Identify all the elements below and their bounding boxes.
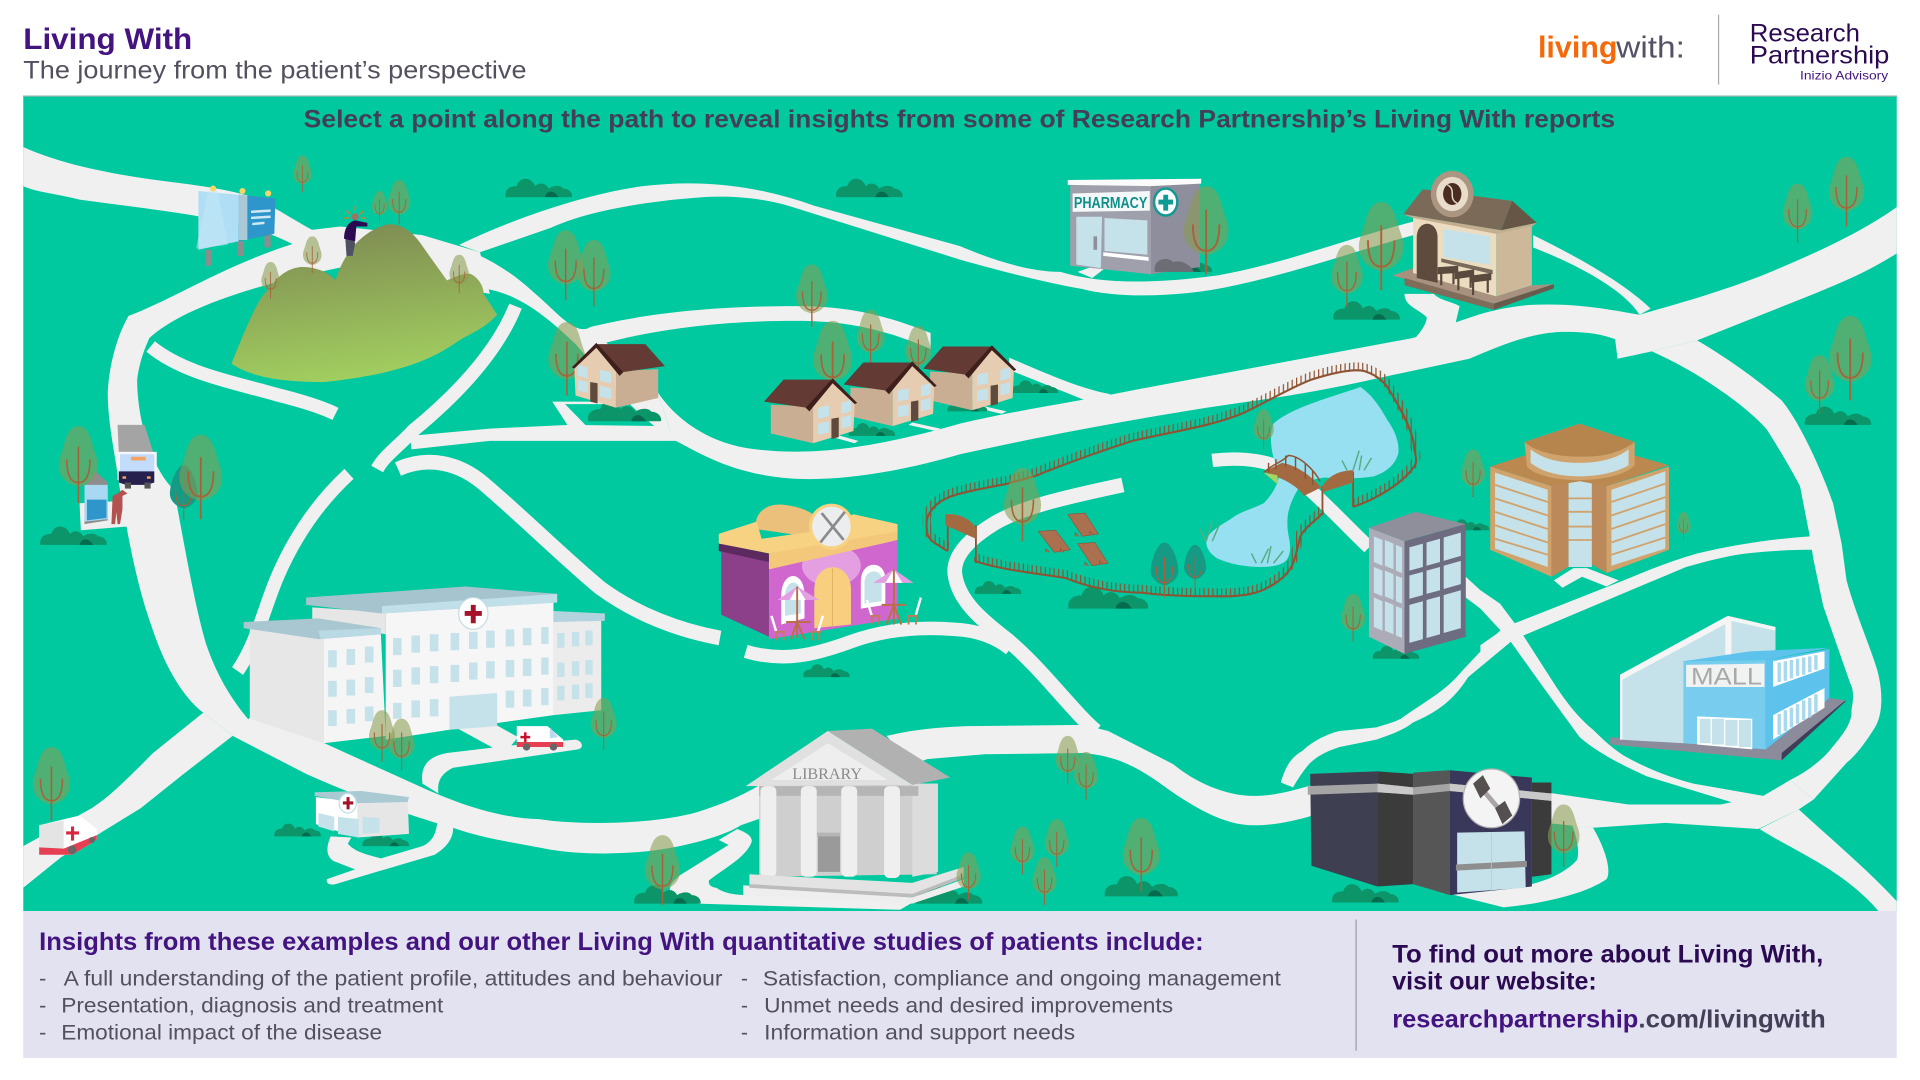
road: mall diagonal lower (1281, 629, 1511, 787)
icon: mall (1610, 616, 1845, 760)
logo: Research Partnership: Research (1750, 20, 1860, 48)
thin roads (151, 306, 1369, 731)
paths: house slivers (833, 405, 1007, 443)
bushes (40, 179, 1871, 904)
icon: picnic tables (1038, 513, 1108, 566)
road: restaurant back (398, 462, 720, 638)
path: house driveway (552, 402, 624, 426)
road network (23, 147, 1897, 911)
road: bottom right (1760, 809, 1897, 911)
insights list left: - (39, 994, 46, 1018)
icon: mall: MALL (1691, 663, 1762, 690)
road: hill road to houses (416, 238, 673, 440)
path: coffee shop stub (1404, 294, 1460, 340)
icon: office tower (1369, 512, 1466, 654)
icon: hill (231, 224, 497, 382)
call to action: visit our website: (1392, 967, 1597, 995)
logo: livingwith: living (1538, 31, 1618, 65)
road: top sweep to coffee shop (459, 183, 1418, 295)
call to action: researchpartnership (1392, 1005, 1638, 1033)
icon: hospital (244, 587, 605, 743)
path: pharmacy entry (1078, 266, 1108, 278)
pharmacy cross badge (1154, 189, 1177, 216)
call to action (1392, 940, 1826, 1033)
icon: bus (118, 425, 157, 489)
library columns (760, 786, 900, 878)
subtitle: The journey from the patient’s perspective (23, 56, 527, 84)
orange building glass (1495, 473, 1548, 567)
orange building roof (1490, 456, 1669, 486)
title: Living With (23, 23, 192, 56)
road: restaurant front (746, 628, 1010, 657)
road: hub to ambulance (23, 713, 233, 888)
icon: billboard (196, 186, 276, 266)
path: hospital drive (456, 725, 518, 749)
insights list right: - (741, 994, 748, 1018)
icon: ambulance on road (39, 816, 97, 855)
library sign: LIBRARY (792, 766, 863, 783)
gym dumbbell badge (1463, 769, 1520, 828)
call to action: To find out more about Living With, (1392, 940, 1823, 968)
instruction heading: Select a point along the path to reveal insights from some of Research Partnership’s Living With reports (304, 105, 1615, 133)
path: hospital lane (422, 740, 582, 793)
icon: house middle (844, 361, 937, 426)
logo: livingwith: with: (1615, 31, 1685, 65)
icon: house one (572, 343, 665, 408)
road: gym bypass (1445, 825, 1608, 907)
icon: restaurant (719, 504, 921, 640)
coffee shop base (1392, 268, 1554, 304)
insights list left: A full understanding of the patient profile, attitudes and behaviour (64, 967, 722, 991)
icon: ambulance at hospital (517, 726, 563, 751)
trees behind buildings (548, 310, 931, 398)
icon: library (743, 729, 964, 904)
insights list right (741, 967, 1281, 1045)
library pediment (828, 729, 950, 785)
restaurant plate badge (811, 505, 852, 548)
insights list right: - (741, 1021, 748, 1045)
icon: park gates (945, 470, 1353, 539)
hospital left wing (312, 607, 386, 634)
road: hub to library (233, 716, 762, 854)
insights heading: Insights from these examples and our other Living With quantitative studies of patients include: (39, 928, 1204, 956)
icon: pharmacy (1068, 179, 1201, 274)
icon: bridge (1264, 456, 1321, 496)
road: lower houses lane (410, 425, 676, 449)
road: hill foot (151, 347, 336, 414)
call to action: .com/livingwith (1638, 1005, 1826, 1033)
header title block (23, 23, 527, 84)
coffee shop walls (1413, 217, 1496, 296)
restaurant umbrellas and tables (778, 587, 819, 600)
hospital windows (328, 627, 593, 730)
insights list left (39, 967, 722, 1045)
icon: orange office building (1490, 424, 1669, 577)
logo: Research Partnership: Inizio Advisory (1800, 69, 1889, 83)
hospital main block (386, 601, 553, 740)
hospital right wing (553, 618, 601, 715)
panel: insights footer (23, 911, 1897, 1058)
road: behind hill link (288, 227, 490, 294)
icon: bus stop with person (80, 471, 127, 530)
road: main east-west (658, 207, 1897, 479)
icon: pond and river (1206, 387, 1399, 567)
icon: house back (923, 345, 1016, 410)
logo: Research Partnership (1718, 15, 1889, 84)
insights list left: Emotional impact of the disease (61, 1021, 382, 1045)
road: coffee to junction (1533, 235, 1651, 315)
library steps (749, 867, 964, 898)
road: gym to hub (1545, 780, 1813, 829)
insights list left: Presentation, diagnosis and treatment (61, 994, 443, 1018)
insights list left: - (39, 1021, 46, 1045)
icon: gym (1308, 769, 1551, 895)
path: clinic loop (327, 823, 453, 885)
icon: house front (764, 378, 857, 443)
coffee shop roof (1403, 189, 1512, 230)
coffee stools (1439, 267, 1490, 295)
road: park to tower (1212, 459, 1369, 547)
pond reeds (1200, 451, 1371, 563)
icon: pharmacy: PHARMACY (1074, 195, 1148, 212)
road: mall diagonal upper (1480, 536, 1815, 664)
insights list left: - (39, 967, 46, 991)
insights list right: - (741, 967, 748, 991)
coffee bean sign (1431, 171, 1474, 217)
path: office entry (1554, 568, 1619, 588)
insights list right: Information and support needs (764, 1021, 1075, 1045)
insights list right: Satisfaction, compliance and ongoing management (763, 967, 1281, 991)
icon: clinic (315, 791, 409, 838)
road: left of hospital (238, 474, 349, 671)
path: library drive (670, 829, 915, 910)
logo: livingwith (1538, 31, 1685, 65)
logo: Research Partnership: Partnership (1750, 42, 1889, 70)
icon: person on hill (344, 206, 367, 256)
road: arc around the hill down to hub (108, 244, 343, 736)
icon: coffee shop (1392, 171, 1554, 310)
road: library to gym (887, 725, 1313, 825)
hospital red cross badge (459, 598, 488, 629)
orange building wings (1490, 467, 1551, 577)
road: tower to hub (1466, 577, 1763, 808)
insights list right: Unmet needs and desired improvements (764, 994, 1173, 1018)
road: diagonal behind hill (377, 306, 516, 469)
road: upper house loop (590, 306, 931, 349)
trees in front (33, 156, 1872, 905)
road: top left entry (23, 147, 340, 245)
panel: map (23, 96, 1897, 911)
road: park to junction (955, 485, 1123, 731)
fence around park (927, 367, 1416, 596)
road: right loop (1652, 340, 1881, 800)
